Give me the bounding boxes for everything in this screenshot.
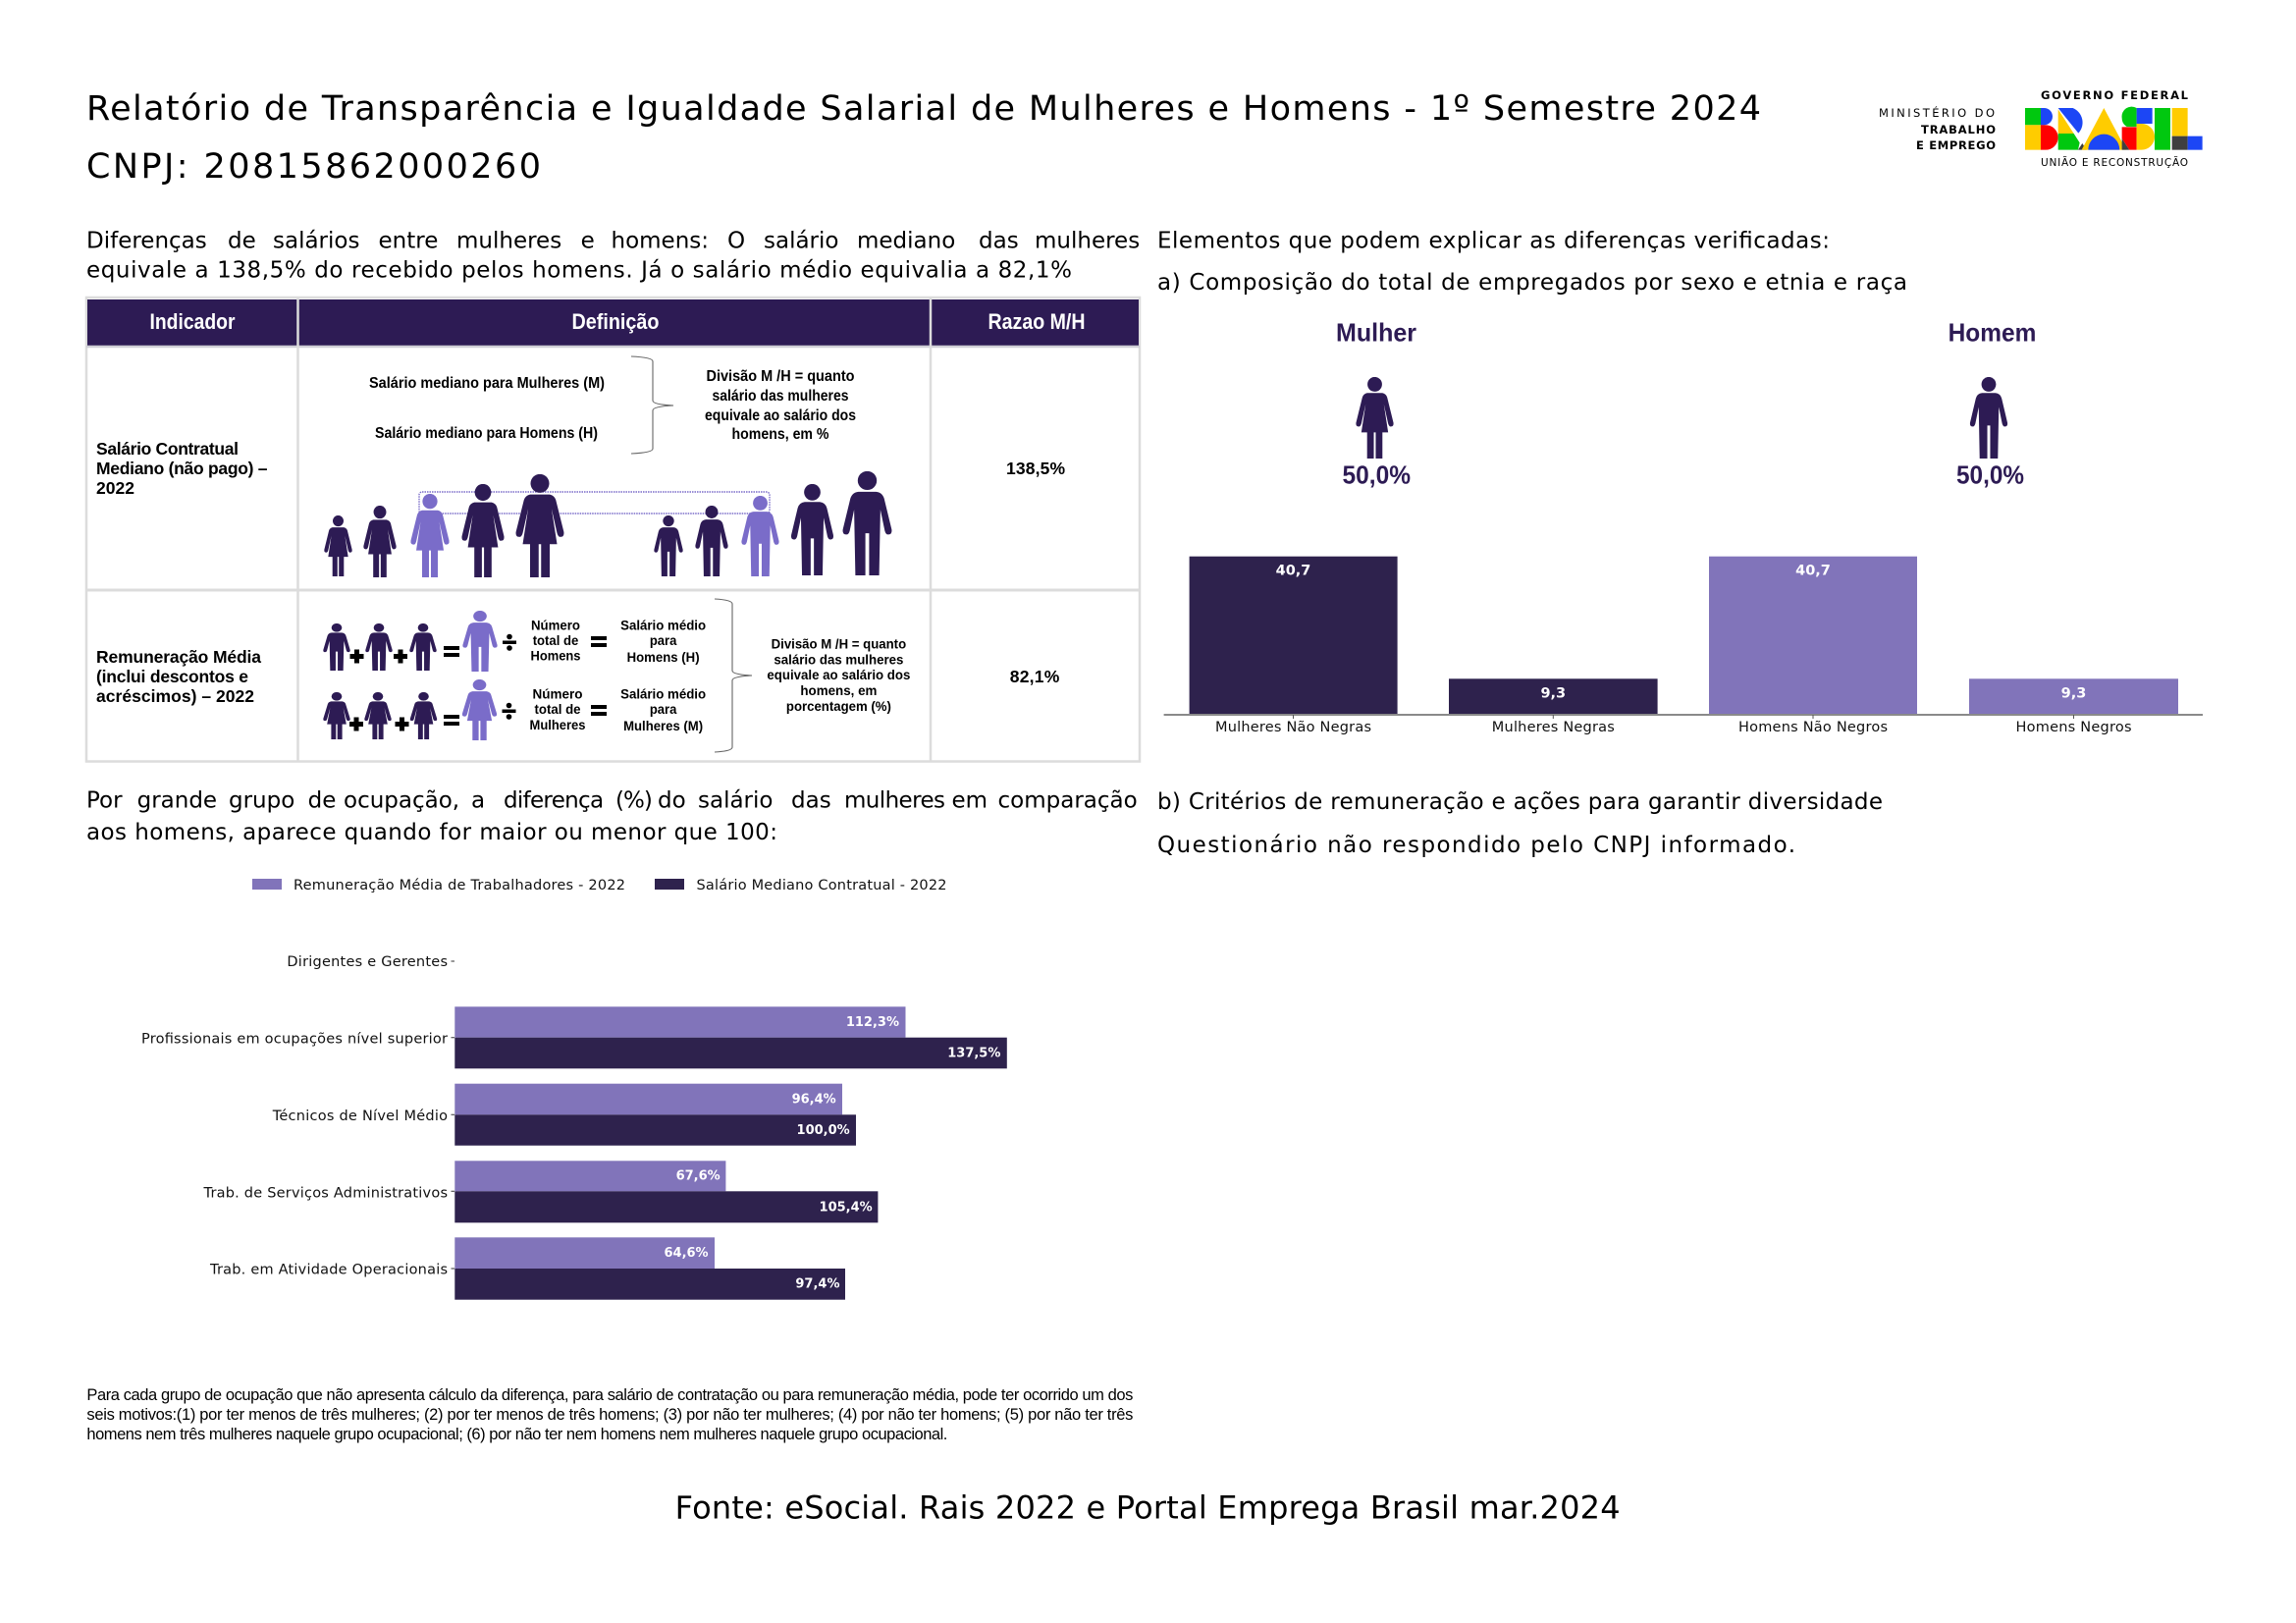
text block: salary differences: mulheres [1035,229,1140,254]
bars: Profissionais: 112,3% [846,1015,899,1030]
definition: division text [767,637,910,714]
text block: explaining elements: Elementos que podem explicar as diferenças verificadas: [1157,229,1830,254]
icons: women by height [324,474,563,577]
text block: salary differences: equivale a 138,5% do recebido pelos homens. Já o salário médio equivalia a 82,1% [86,258,1072,284]
definition: median salary labels [369,375,605,442]
bars: Técnicos: 100,0% [797,1123,850,1138]
footnote: Para cada grupo de ocupação que não apresenta cálculo da diferença, para salário de contratação ou para remuneração média, pode ter ocorrido um dos [86,1386,1133,1404]
formula: men [323,611,607,672]
logo: Ministério do Trabalho e Emprego / Governo Federal Brasil: E EMPREGO [1916,138,1996,152]
text block: occupation groups: salário [698,788,773,814]
logo: Ministério do Trabalho e Emprego / Governo Federal Brasil: MINISTÉRIO DO [1879,105,1995,120]
table header [149,309,1086,334]
text block: salary differences [86,229,1140,284]
formula: men labels: Homens [530,649,581,664]
brace [631,356,673,454]
text block: remuneration criteria: b) Critérios de remuneração e ações para garantir diversidade [1157,789,1883,815]
bars: Serviços Administrativos: 67,6% [676,1169,721,1184]
row label: Salário Contratual: Salário Contratual [96,439,239,459]
median highlight box [419,492,770,514]
value: 138,5%: 138,5% [1006,459,1065,478]
text block: occupation groups: aos homens, aparece quando for maior ou menor que 100: [86,820,777,845]
footnote [86,1386,1133,1443]
formula: women labels: para [650,702,677,717]
definition: division text: Divisão M /H = quanto [772,637,906,652]
formula: women labels: total de [534,702,581,717]
text block: salary differences: salário [764,229,838,254]
logo: Ministério do Trabalho e Emprego / Governo Federal Brasil: UNIÃO E RECONSTRUÇÃO [2041,156,2188,169]
legend [252,878,946,893]
text block: occupation groups: a [471,788,485,814]
text block: occupation groups: Por [86,788,123,814]
category labels: Trab. de Serviços Administrativos [202,1185,448,1201]
formula: women [323,679,607,740]
table: indicators [86,298,1140,762]
row label: Remuneração Média: Remuneração Média [96,647,261,667]
footnote: seis motivos:(1) por ter menos de três mulheres; (2) por ter menos de três homens; (3) por não ter mulheres; (4) por não ter homens; (5) por não ter três [86,1406,1133,1424]
bar labels: Homens Não Negros [1738,720,1888,735]
text block: salary differences: mediano [857,229,955,254]
definition: division text: salário das mulheres [713,388,848,405]
row label: Salário Contratual: Mediano (não pago) – [96,459,268,478]
definition: median salary labels: Salário mediano para Homens (H) [375,425,598,442]
text block: occupation groups: (%) [615,788,652,814]
bar labels: Mulheres Não Negras [1215,720,1371,735]
bars: Serviços Administrativos: 105,4% [820,1200,873,1215]
text block: salary differences: homens: [611,229,709,254]
text block: salary differences: salários [273,229,359,254]
text block: occupation groups [86,788,1138,845]
formula: women labels: Número [532,687,583,702]
bar values: 40,7 [1276,564,1310,579]
icons: men by height [654,471,891,576]
formula: men labels: Número [531,619,580,633]
text block: occupation groups: comparação [997,788,1138,814]
definition: division text: equivale ao salário dos [705,407,856,424]
category labels [141,954,448,1278]
text block: occupation groups: diferença [504,788,603,814]
bars: Atividade Operacionais: 64,6% [664,1246,709,1261]
bar chart: ethnicity and race composition [1164,557,2203,735]
value: 82,1%: 82,1% [1010,667,1060,686]
title [86,89,1761,187]
panel: sex composition [1336,318,2036,490]
title: CNPJ: 20815862000260 [86,147,541,187]
brace [715,599,752,752]
bars: Profissionais: 137,5% [947,1047,1000,1061]
category labels: Trab. em Atividade Operacionais [209,1263,448,1278]
bars [1190,557,2178,715]
formula: men labels: total de [533,633,579,648]
formula: men labels: para [650,633,677,648]
bar values: 40,7 [1795,564,1831,579]
text block: explaining elements: a) Composição do total de empregados por sexo e etnia e raça [1157,270,1907,296]
value: woman share: 50,0% [1343,460,1411,490]
bar labels: Mulheres Negras [1492,720,1615,735]
row label: Salário Contratual [96,439,268,498]
text block: salary differences: e [581,229,595,254]
table header: Definição [571,309,660,334]
formula: women labels: Mulheres [530,718,585,732]
formula: men labels: Salário médio [620,619,706,633]
bars: Atividade Operacionais [454,1237,845,1300]
formula: men labels: Homens (H) [627,650,700,665]
formula: women labels: Mulheres (M) [623,719,703,733]
text block: remuneration criteria [1157,789,1883,858]
source note: Fonte: eSocial. Rais 2022 e Portal Emprega Brasil mar.2024 [675,1489,1621,1527]
bars: Atividade Operacionais: 97,4% [795,1277,840,1292]
text block: salary differences: entre [379,229,438,254]
row label: Remuneração Média: (inclui descontos e [96,667,248,686]
bar labels: Homens Negros [2016,720,2132,735]
logo: Ministério do Trabalho e Emprego / Governo Federal Brasil: GOVERNO FEDERAL [2041,88,2189,102]
definition: division text: homens, em % [732,426,829,443]
definition: median salary labels: Salário mediano para Mulheres (M) [369,375,605,392]
bar labels [1215,720,2132,735]
icon: woman [1356,377,1394,459]
category labels: Profissionais em ocupações nível superior [141,1032,448,1048]
footnote: homens nem três mulheres naquele grupo ocupacional; (6) por não ter nem homens nem mulheres naquele grupo ocupacional. [86,1426,947,1443]
formula: women labels: Salário médio [620,687,706,702]
text block: occupation groups: grupo [229,788,294,814]
title: Relatório de Transparência e Igualdade Salarial de Mulheres e Homens - 1º Semestre 2024 [86,89,1761,129]
text block: occupation groups: grande [137,788,217,814]
table header: Razao M/H [988,309,1086,334]
category labels: Dirigentes e Gerentes [287,954,448,970]
text block: occupation groups: ocupação, [344,788,459,814]
text block: salary differences: das [979,229,1019,254]
table header: Indicador [149,309,236,334]
text block: occupation groups: de [308,788,336,814]
row label: Remuneração Média [96,647,261,706]
bar values: 9,3 [1540,686,1566,702]
text block: occupation groups: mulheres [844,788,944,814]
heading: Homem: Homem [1949,318,2036,348]
bar values: 9,3 [2061,686,2086,702]
text block: explaining elements [1157,229,1907,296]
text block: remuneration criteria: Questionário não respondido pelo CNPJ informado. [1157,833,1795,858]
text block: salary differences: mulheres [456,229,561,254]
text block: occupation groups: em [952,788,988,814]
bars: Profissionais [454,1006,1007,1068]
text block: salary differences: de [228,229,256,254]
definition: division text: homens, em [800,683,877,698]
logo: Ministério do Trabalho e Emprego / Governo Federal Brasil: TRABALHO [1921,123,1996,136]
logo: Ministério do Trabalho e Emprego / Governo Federal Brasil [1879,88,2203,169]
bars: Técnicos [454,1084,856,1146]
legend: Remuneração Média de Trabalhadores - 2022 [294,878,625,893]
definition: division text: salário das mulheres [774,653,903,668]
definition: division text: porcentagem (%) [786,699,891,714]
bar values [1276,564,2086,702]
bars: Serviços Administrativos [454,1161,878,1222]
row label: Salário Contratual: 2022 [96,478,134,498]
row label: Remuneração Média: acréscimos) – 2022 [96,686,254,706]
bars: Técnicos: 96,4% [792,1092,836,1107]
legend: Salário Mediano Contratual - 2022 [697,878,946,893]
text block: occupation groups: das [791,788,831,814]
bar chart: occupation groups [141,954,1007,1300]
definition: division text: Divisão M /H = quanto [707,368,854,385]
text block: salary differences: O [727,229,745,254]
definition: division text: equivale ao salário dos [767,668,910,682]
formula: women labels [530,687,706,733]
heading: Mulher: Mulher [1336,318,1416,348]
text block: occupation groups: do [658,788,686,814]
icon: man [1970,377,2007,459]
value: man share: 50,0% [1956,460,2024,490]
definition: division text [705,368,856,443]
formula: men labels [530,619,706,665]
category labels: Técnicos de Nível Médio [272,1109,448,1124]
text block: salary differences: Diferenças [86,229,207,254]
